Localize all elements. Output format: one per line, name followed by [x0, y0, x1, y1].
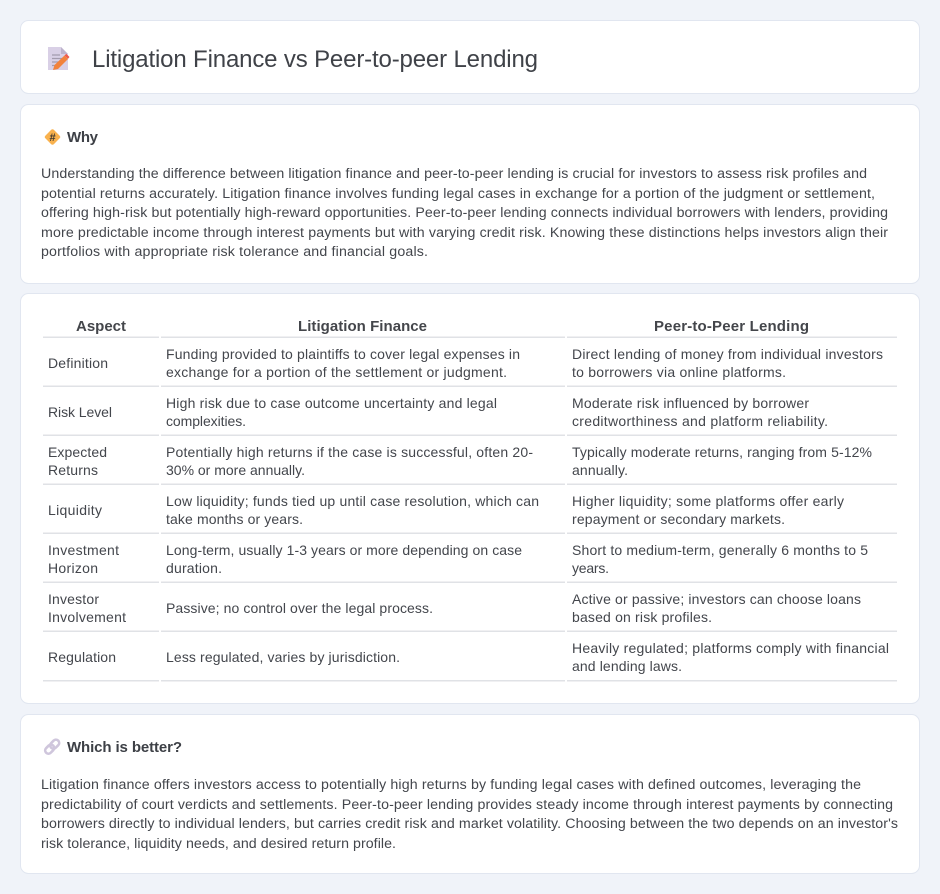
heading: which is better: Which is better?	[67, 739, 182, 756]
row: investment horizon: years.	[572, 560, 609, 576]
row: investor involvement	[48, 591, 861, 625]
row: definition: exchange for a portion of the settlement or judgment.	[166, 364, 507, 380]
row: investment horizon: Investment	[48, 542, 119, 558]
row: expected returns: Potentially high returns if the case is successful, often 20-	[166, 444, 533, 460]
table header row	[76, 318, 809, 335]
row: risk level: High risk due to case outcome uncertainty and legal	[166, 395, 497, 411]
row: regulation: Regulation	[48, 649, 116, 665]
icon: orange diamond sign: #	[49, 132, 56, 144]
row: regulation: Less regulated, varies by jurisdiction.	[166, 649, 400, 665]
text block: why paragraph: offering high-risk but potentially high-reward opportunities. Peer-to-peer lending connects individual borrowers with lenders, providing	[41, 205, 888, 221]
text block: which is better paragraph: predictability of court verdicts and settlements. Peer-to-peer lending provides steady income through interest payments by connecting	[41, 797, 893, 813]
row: regulation: Heavily regulated; platforms comply with financial	[572, 640, 889, 656]
row: liquidity: take months or years.	[166, 511, 303, 527]
row: liquidity: repayment or secondary markets.	[572, 511, 785, 527]
row: expected returns	[48, 444, 872, 478]
text block: why paragraph	[41, 166, 888, 260]
row: investor involvement: Passive; no control over the legal process.	[166, 600, 433, 616]
row: definition: to borrowers via online platforms.	[572, 364, 786, 380]
row: expected returns: Returns	[48, 462, 98, 478]
row: expected returns: annually.	[572, 462, 628, 478]
row: definition: Direct lending of money from individual investors	[572, 346, 883, 362]
row: definition: Funding provided to plaintiffs to cover legal expenses in	[166, 346, 520, 362]
icon: chain link	[44, 738, 61, 755]
title: Litigation Finance vs Peer-to-peer Lending	[92, 46, 538, 73]
row: regulation	[48, 640, 889, 674]
icon: document with pencil	[48, 47, 70, 70]
row: investment horizon: Horizon	[48, 560, 98, 576]
panel: which is better	[20, 714, 920, 874]
row: investor involvement: Investor	[48, 591, 99, 607]
row: risk level: Risk Level	[48, 404, 112, 420]
row: risk level: creditworthiness and platform reliability.	[572, 413, 828, 429]
row: investor involvement: Active or passive; investors can choose loans	[572, 591, 861, 607]
row: expected returns: Expected	[48, 444, 107, 460]
row: expected returns: Typically moderate returns, ranging from 5-12%	[572, 444, 872, 460]
table header row: Litigation Finance	[298, 318, 427, 335]
text block: why paragraph: Understanding the difference between litigation finance and peer-to-peer lending is crucial for investors to assess risk profiles and	[41, 166, 867, 182]
text block: why paragraph: more predictable income through interest payments but with varying credit risk. Knowing these distinctions helps investors align their	[41, 225, 888, 241]
row: investment horizon	[48, 542, 868, 576]
row: risk level: Moderate risk influenced by borrower	[572, 395, 809, 411]
row: investment horizon: Long-term, usually 1-3 years or more depending on case	[166, 542, 522, 558]
row: investment horizon: duration.	[166, 560, 222, 576]
row: investment horizon: Short to medium-term, generally 6 months to 5	[572, 542, 868, 558]
text block: which is better paragraph: borrowers directly to individual lenders, but carries credit risk and market volatility. Choosing between the two depends on an investor's	[41, 816, 898, 832]
row: regulation: and lending laws.	[572, 658, 682, 674]
panel: comparison table	[20, 294, 920, 704]
icon: orange diamond sign	[44, 129, 61, 145]
row: definition	[48, 346, 883, 380]
row: definition: Definition	[48, 355, 108, 371]
row: liquidity: Liquidity	[48, 502, 102, 518]
text block: why paragraph: portfolios with appropriate risk tolerance and financial goals.	[41, 244, 428, 260]
text block: which is better paragraph	[41, 777, 898, 852]
row: liquidity	[48, 493, 844, 527]
panel: title card	[20, 20, 920, 94]
heading: why: Why	[67, 129, 99, 146]
text block: which is better paragraph: Litigation finance offers investors access to potentially high returns by funding legal cases with defined outcomes, leveraging the	[41, 777, 861, 793]
row: risk level: complexities.	[166, 413, 246, 429]
text block: why paragraph: potential returns accurately. Litigation finance involves funding legal cases in exchange for a portion of the judgment or settlement,	[41, 186, 875, 202]
row: risk level	[48, 395, 828, 429]
panel: why	[20, 104, 920, 284]
row: expected returns: 30% or more annually.	[166, 462, 305, 478]
table header row: Peer-to-Peer Lending	[654, 318, 809, 335]
text block: which is better paragraph: risk tolerance, liquidity needs, and desired return profile.	[41, 836, 396, 852]
row: investor involvement: based on risk profiles.	[572, 609, 712, 625]
row: liquidity: Low liquidity; funds tied up until case resolution, which can	[166, 493, 539, 509]
row: liquidity: Higher liquidity; some platforms offer early	[572, 493, 844, 509]
table header row: Aspect	[76, 318, 126, 335]
row: investor involvement: Involvement	[48, 609, 126, 625]
